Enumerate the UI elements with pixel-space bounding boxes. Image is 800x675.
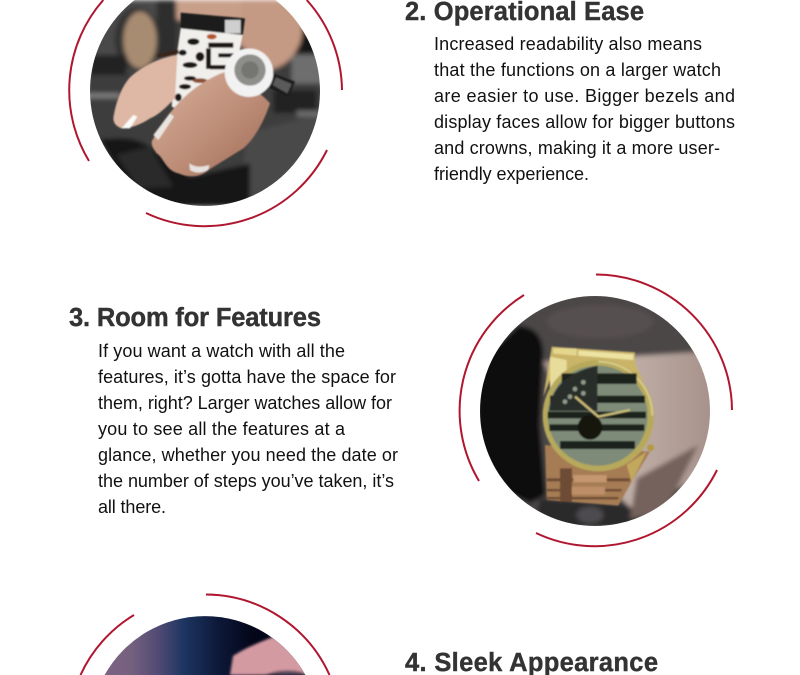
- decorative ring: section 2 photo: [69, 0, 342, 226]
- decorative ring: section 3 photo: [460, 274, 732, 546]
- text block: section 2 body: are easier to use. Bigger bezels and: [434, 86, 735, 106]
- text block: section 3 body: If you want a watch with all the: [98, 341, 345, 361]
- heading: section 3: 3. Room for Features: [69, 304, 321, 332]
- text block: section 3 body: features, it’s gotta have the space for: [98, 367, 396, 387]
- text block: section 2 body: that the functions on a larger watch: [434, 60, 721, 80]
- text block: section 3 body: all there.: [98, 497, 166, 517]
- text block: section 3 body: [98, 341, 398, 517]
- text block: section 2 body: Increased readability also means: [434, 34, 702, 54]
- decorative ring: section 4 photo: [80, 594, 330, 675]
- text block: section 2 body: [434, 34, 735, 184]
- photo: gold watch with flag dial: [477, 292, 717, 528]
- photo: hands tying shoe with white watch: [87, 0, 323, 207]
- text block: section 3 body: glance, whether you need the date or: [98, 445, 398, 465]
- photo: section 4 portrait crop: [104, 616, 306, 675]
- text block: section 3 body: the number of steps you’ve taken, it’s: [98, 471, 394, 491]
- text block: section 2 body: and crowns, making it a more user-: [434, 138, 720, 158]
- text block: section 3 body: them, right? Larger watches allow for: [98, 393, 392, 413]
- text block: section 2 body: friendly experience.: [434, 164, 589, 184]
- text block: section 2 body: display faces allow for bigger buttons: [434, 112, 735, 132]
- text block: section 3 body: you to see all the features at a: [98, 419, 346, 439]
